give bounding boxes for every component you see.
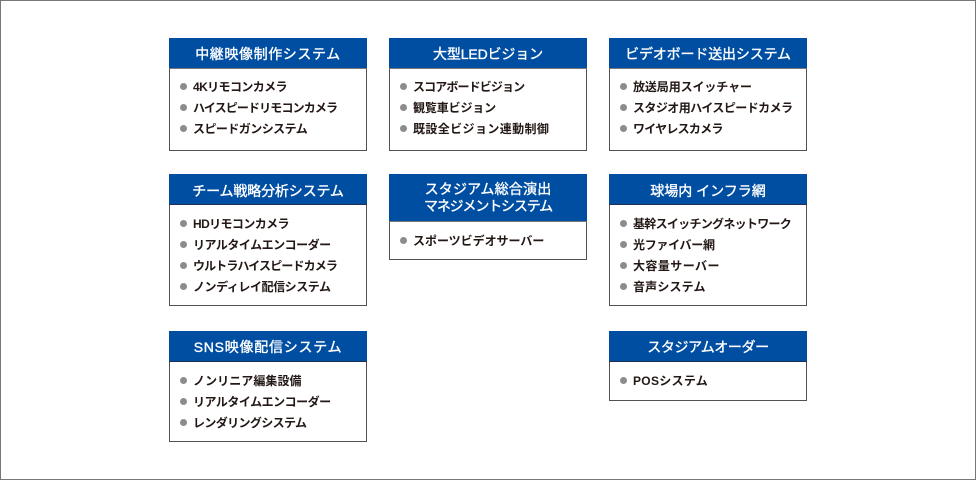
item: 既設全ビジョン連動制御: 既設全ビジョン連動制御 (413, 122, 549, 136)
heading: 大型LEDビジョン (389, 38, 587, 69)
item: 放送局用スイッチャー: 放送局用スイッチャー (633, 80, 752, 94)
heading: SNS映像配信システム (169, 331, 367, 362)
heading: チーム戦略分析システム (169, 174, 367, 205)
item: ノンリニア編集設備: ノンリニア編集設備 (193, 374, 302, 388)
item: HDリモコンカメラ: HDリモコンカメラ (193, 216, 289, 230)
heading: ビデオボード送出システム (609, 38, 807, 69)
item: スポーツビデオサーバー: スポーツビデオサーバー (413, 234, 544, 248)
item: 観覧車ビジョン: 観覧車ビジョン (413, 101, 496, 115)
heading: ビデオボード送出システム: ビデオボード送出システム (625, 46, 791, 62)
item: スタジオ用ハイスピードカメラ: スタジオ用ハイスピードカメラ (633, 101, 792, 115)
heading: スタジアム総合演出マネジメントシステム: マネジメントシステム (424, 198, 552, 214)
panel: 球場内 インフラ網 (609, 174, 807, 306)
panel: スタジアム総合演出マネジメントシステム (389, 174, 587, 260)
heading: 球場内 インフラ網: 球場内 インフラ網 (650, 183, 766, 199)
heading: スタジアムオーダー: スタジアムオーダー (647, 339, 769, 355)
panel: 大型LEDビジョン (389, 38, 587, 151)
item: レンダリングシステム: レンダリングシステム (193, 416, 306, 430)
panel: チーム戦略分析システム (169, 174, 367, 306)
item: リアルタイムエンコーダー: リアルタイムエンコーダー (193, 395, 331, 409)
heading: 中継映像制作システム (169, 38, 367, 69)
item: ハイスピードリモコンカメラ: ハイスピードリモコンカメラ (193, 101, 337, 115)
heading: SNS映像配信システム: SNS映像配信システム (194, 339, 342, 355)
item: 4Kリモコンカメラ: 4Kリモコンカメラ (193, 80, 287, 94)
item: ウルトラハイスピードカメラ: ウルトラハイスピードカメラ (193, 258, 337, 272)
item: スピードガンシステム: スピードガンシステム (193, 122, 307, 136)
item: POSシステム: POSシステム (633, 374, 708, 388)
panel: ビデオボード送出システム (609, 38, 807, 151)
item: リアルタイムエンコーダー: リアルタイムエンコーダー (193, 238, 331, 252)
heading: スタジアムオーダー (609, 331, 807, 362)
heading: スタジアム総合演出マネジメントシステム: スタジアム総合演出 (425, 181, 551, 197)
heading: 大型LEDビジョン: 大型LEDビジョン (433, 46, 543, 62)
panel: 中継映像制作システム (169, 38, 367, 151)
item: ワイヤレスカメラ: ワイヤレスカメラ (633, 122, 723, 136)
heading: チーム戦略分析システム: チーム戦略分析システム (192, 183, 344, 199)
item: 音声システム: 音声システム (633, 280, 706, 294)
item: 光ファイバー網: 光ファイバー網 (633, 238, 715, 252)
heading: 中継映像制作システム: 中継映像制作システム (195, 46, 341, 62)
panel: SNS映像配信システム (169, 331, 367, 442)
panel: スタジアムオーダー (609, 331, 807, 401)
heading: スタジアム総合演出マネジメントシステム (389, 174, 587, 222)
item: ノンディレイ配信システム: ノンディレイ配信システム (193, 280, 331, 294)
item: 基幹スイッチングネットワーク: 基幹スイッチングネットワーク (633, 216, 791, 230)
item: 大容量サーバー: 大容量サーバー (633, 258, 720, 272)
item: スコアボードビジョン: スコアボードビジョン (413, 80, 524, 94)
heading: 球場内 インフラ網 (609, 174, 807, 205)
